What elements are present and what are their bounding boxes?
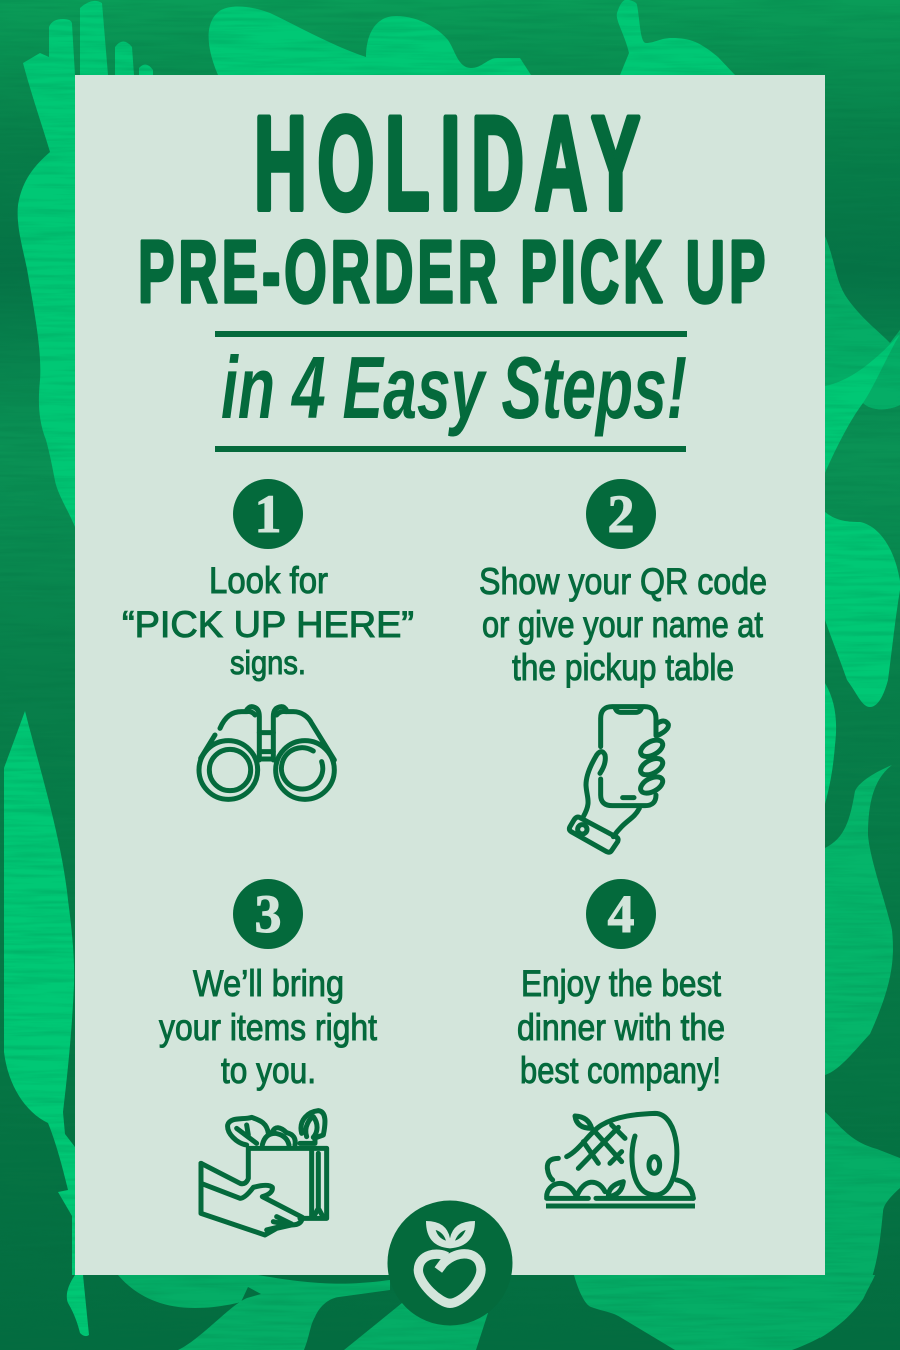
step 1 text: [122, 560, 414, 681]
rule bottom: [215, 446, 686, 452]
step 2 text: Show your QR code: [479, 561, 767, 602]
icon: binoculars: [199, 707, 334, 799]
badge 2: 2: [608, 484, 634, 544]
step 4 text: dinner with the: [517, 1007, 725, 1048]
step 3 text: to you.: [221, 1050, 316, 1091]
icon: grocery bag and hand: [201, 1111, 327, 1235]
vegetable shapes: right: [820, 236, 900, 1338]
step 2: [479, 479, 767, 852]
badge 3: 3: [254, 884, 282, 944]
badge 1: 1: [254, 484, 282, 544]
badge 4: [586, 879, 656, 949]
vegetable shapes: bottom: [118, 1275, 875, 1350]
badge 4: 4: [608, 884, 634, 944]
icon: phone in hand: [569, 707, 668, 852]
script heading: in 4 Easy Steps!: [221, 338, 687, 437]
step 4: [517, 879, 725, 1206]
step 4 text: Enjoy the best: [521, 963, 722, 1004]
logo: [388, 1200, 512, 1326]
badge 1: [233, 479, 303, 549]
badge 2: [586, 479, 656, 549]
step 1 text: signs.: [230, 644, 306, 681]
vegetable shapes: left: [4, 711, 89, 1336]
step 3 text: We’ll bring: [193, 963, 344, 1004]
step 1: [122, 479, 414, 799]
step 1 text: Look for: [209, 560, 328, 601]
step 2 text: the pickup table: [512, 647, 734, 688]
step 4 text: [517, 963, 725, 1091]
step 3 text: your items right: [159, 1007, 378, 1048]
step 2 text: or give your name at: [482, 604, 764, 645]
step 3 text: [159, 963, 378, 1091]
step 4 text: best company!: [520, 1050, 721, 1091]
vegetable shapes: top: [18, 0, 735, 527]
subtitle: pre-order pick up: PRE-ORDER PICK UP: [138, 223, 765, 321]
panel: [75, 75, 825, 1275]
step 1 text: “PICK UP HERE”: [122, 604, 414, 645]
step 2 text: [479, 561, 767, 688]
rule top: [215, 331, 687, 337]
icon: ham: [546, 1113, 695, 1206]
step 3: [159, 879, 378, 1235]
title: holiday: HOLIDAY: [254, 89, 640, 238]
badge 3: [233, 879, 303, 949]
